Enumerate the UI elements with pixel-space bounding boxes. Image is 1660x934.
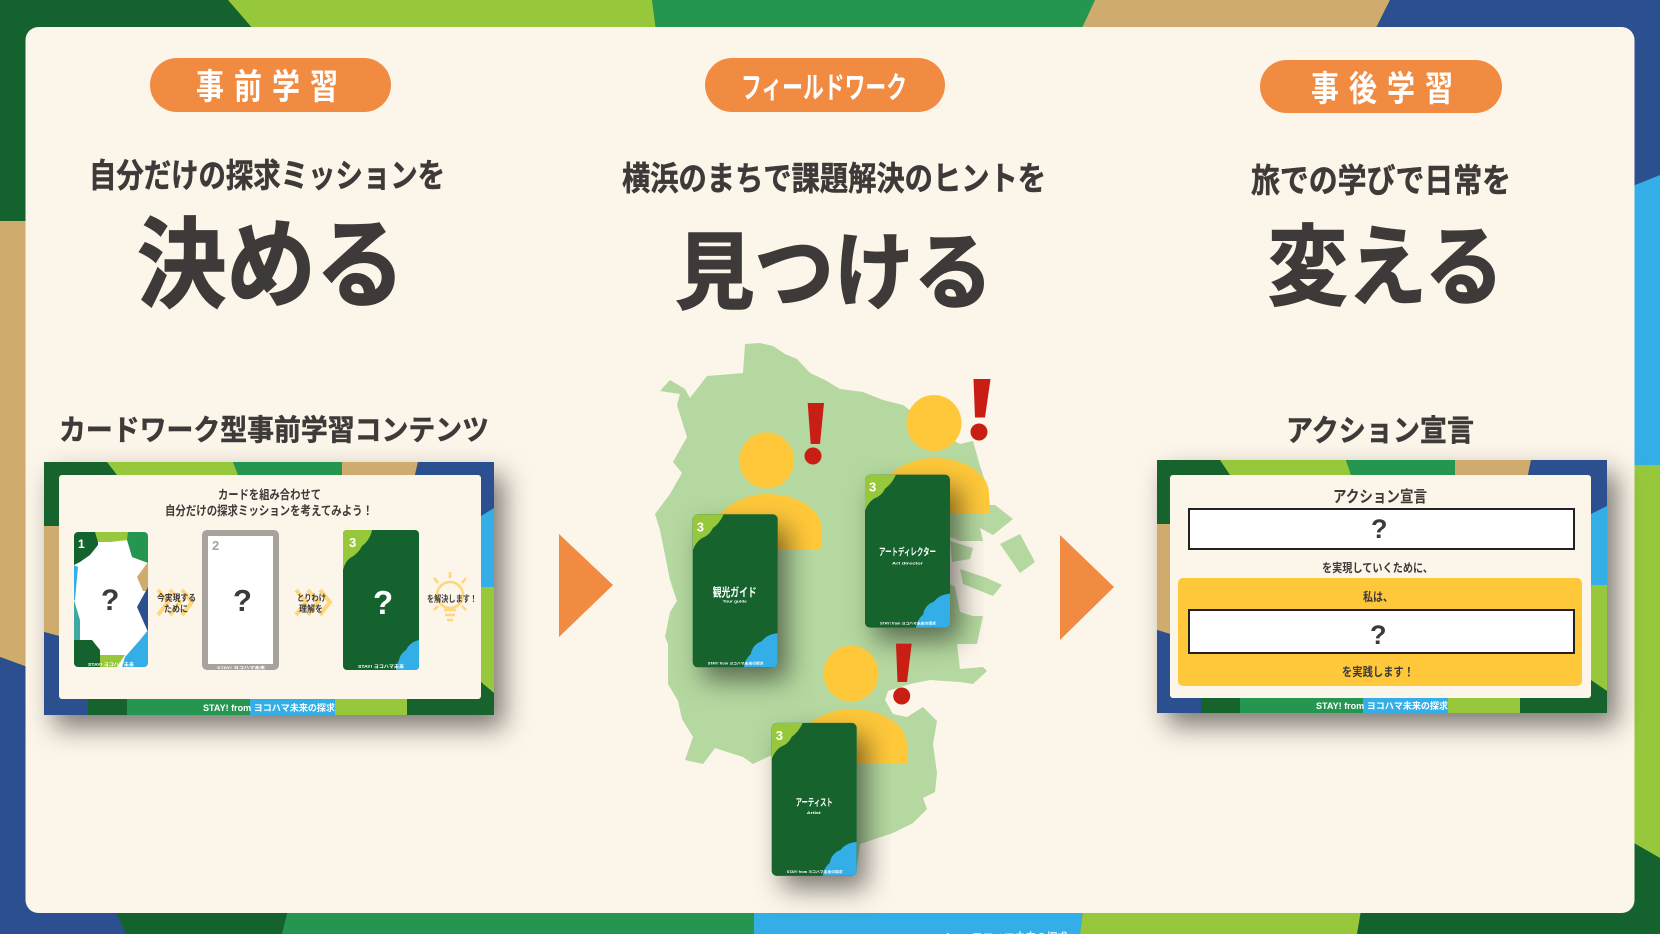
thumbnail title (165, 487, 373, 518)
pill: フィールドワーク (705, 58, 945, 112)
subheading: yokohama: 横浜のまちで課題解決のヒントを (622, 160, 1046, 197)
arrow 2 (1060, 535, 1114, 640)
connecting text: を実現していくために、 (1322, 560, 1433, 575)
chevrons and caption 1: ために (164, 604, 188, 614)
card 2: ? (233, 583, 252, 618)
thumbnail title: カードを組み合わせて (218, 487, 321, 502)
chevrons and caption 1 (157, 590, 196, 615)
card: アートディレクター: STAY! from ヨコハマ未来の探求 (880, 621, 937, 626)
card: アーティスト: 3 (776, 728, 783, 743)
card: アーティスト: Artist (807, 811, 822, 815)
card 2: 2 (212, 538, 219, 553)
card: アートディレクター (865, 475, 950, 628)
column: pre-learning heading (59, 58, 489, 447)
card 1: ? (101, 584, 119, 617)
card 2 (205, 533, 276, 670)
icon: person 1 (712, 432, 822, 550)
card: 観光ガイド (693, 514, 778, 667)
light bulb and caption (427, 572, 477, 620)
slide thumbnail: action declaration: STAY! from ヨコハマ未来の探求 (1316, 700, 1448, 711)
thumbnail title: 自分だけの探求ミッションを考えてみよう！ (165, 503, 373, 518)
card 1 (74, 532, 148, 668)
card: 観光ガイド: 3 (697, 519, 704, 534)
icon: exclamation 2 (970, 379, 990, 440)
big word: 見つける: 見つける (675, 226, 993, 320)
card: アーティスト: アーティスト (796, 797, 833, 809)
card: 観光ガイド: STAY! from ヨコハマ未来の探求 (708, 660, 764, 665)
pill: 事前学習: 事前学習 (196, 67, 348, 107)
slide thumbnail: card work (44, 462, 494, 715)
label: 私は: 私は、 (1363, 589, 1393, 604)
yokohama map (655, 343, 1035, 866)
card 3: 3 (349, 535, 356, 550)
column: fieldwork heading (622, 58, 1046, 320)
column: post-learning heading (1251, 60, 1511, 448)
card: アートディレクター: 3 (869, 480, 876, 495)
icon: person 2 (879, 395, 989, 513)
answer box 2: ? (1370, 620, 1386, 650)
light bulb and caption: を解決します！ (427, 593, 477, 604)
card 1: 1 (78, 537, 85, 551)
thumbnail title: アクション宣言 (1333, 488, 1427, 506)
pill: 事前学習 (150, 58, 391, 112)
pill: 事後学習 (1260, 60, 1502, 113)
section title: card work: カードワーク型事前学習コンテンツ (59, 414, 489, 447)
chevrons and caption 2 (296, 590, 330, 615)
card: アーティスト: STAY! from ヨコハマ未来の探求 (787, 869, 843, 874)
chevrons and caption 1: 今実現する (157, 592, 196, 603)
icon: person 3 (795, 646, 907, 764)
pill: フィールドワーク: フィールドワーク (741, 72, 907, 105)
big word: 決める: 決める (137, 210, 405, 320)
card 3: ? (373, 584, 393, 621)
card 3 (343, 530, 419, 670)
arrow 1 (559, 534, 613, 637)
card 1: STAY! ヨコハマ未来 (88, 661, 135, 668)
card: アートディレクター: アートディレクター (879, 546, 936, 559)
slide thumbnail: card work: STAY! from ヨコハマ未来の探求 (203, 702, 335, 713)
icon: exclamation 1 (804, 403, 824, 464)
person 3 with card: artist (772, 644, 912, 876)
card: アートディレクター: Art director (892, 562, 924, 566)
answer box 1: ? (1371, 514, 1388, 544)
subheading: mission: 自分だけの探求ミッションを (89, 157, 445, 194)
card: 観光ガイド: 観光ガイド (713, 584, 757, 599)
section title: action declaration: アクション宣言 (1286, 415, 1474, 448)
card: 観光ガイド: Tour guide (723, 598, 748, 603)
chevrons and caption 2: とりわけ (297, 593, 326, 603)
slide thumbnail: action declaration (1157, 460, 1607, 713)
chevrons and caption 2: 理解を (299, 603, 323, 614)
answer box 2 (1189, 610, 1574, 653)
big word: 変える: 変える (1268, 218, 1504, 317)
yellow block (1178, 578, 1582, 686)
icon: exclamation 3 (893, 644, 912, 704)
pill: 事後学習: 事後学習 (1311, 69, 1463, 109)
card 2: STAY! ヨコハマ未来 (217, 664, 265, 670)
answer box 1 (1189, 509, 1574, 549)
label: 実践: を実践します！ (1342, 664, 1414, 679)
card: アーティスト (772, 723, 857, 876)
person 2 with card: art director (865, 379, 990, 628)
subheading: daily: 旅での学びで日常を (1251, 162, 1511, 199)
card 3: STAY! ヨコハマ未来 (358, 663, 405, 670)
person 1 with card: tour guide (693, 403, 824, 667)
